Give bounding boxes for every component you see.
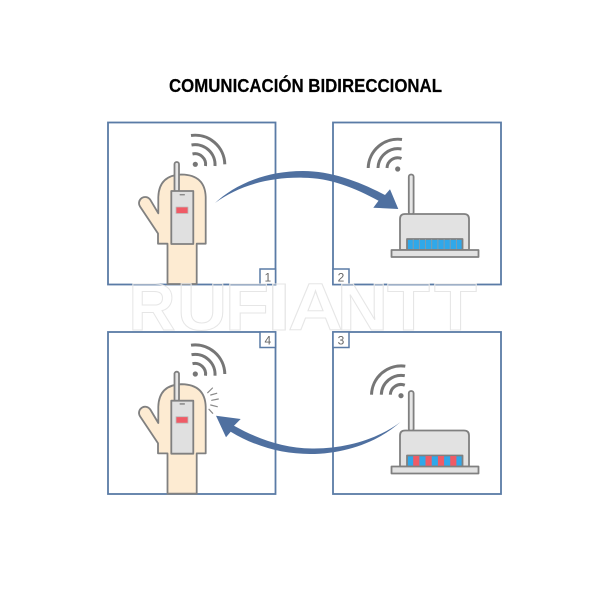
icon: wifi signal xyxy=(191,135,225,167)
panel 2: receiver gets signal xyxy=(333,122,501,284)
panel 3: receiver answers xyxy=(333,332,501,494)
watermark: U xyxy=(177,270,227,345)
arrow: from remote to receiver xyxy=(215,171,398,209)
watermark: F xyxy=(225,270,269,345)
arrow: from receiver to remote xyxy=(216,416,400,454)
panel 1: remote sends signal xyxy=(108,122,276,284)
number badge 3: 3 xyxy=(338,334,345,348)
number badge 1 xyxy=(260,269,276,284)
watermark: N xyxy=(337,270,388,345)
icon: wifi signal xyxy=(372,366,405,398)
icon: vibration burst xyxy=(208,388,218,413)
icon: receiver unit xyxy=(392,391,478,474)
number badge 3 xyxy=(333,332,349,348)
watermark: I xyxy=(267,270,291,345)
watermark xyxy=(128,270,477,345)
panel 4: remote confirms xyxy=(108,332,276,494)
icon: hand holding remote xyxy=(139,372,206,494)
icon: receiver unit xyxy=(392,174,478,257)
icon: wifi signal xyxy=(368,139,402,172)
number badge 1: 1 xyxy=(264,270,271,284)
number badge 4: 4 xyxy=(264,334,271,348)
watermark: T xyxy=(387,270,430,345)
number badge 2: 2 xyxy=(338,270,345,284)
icon: hand holding remote xyxy=(139,162,206,284)
number badge 4 xyxy=(260,332,276,348)
title: COMUNICACIÓN BIDIRECCIONAL xyxy=(169,75,442,96)
icon: wifi signal xyxy=(191,345,225,377)
watermark: T xyxy=(434,270,477,345)
watermark: A xyxy=(288,270,343,345)
watermark: R xyxy=(128,270,176,345)
number badge 2 xyxy=(333,269,349,284)
